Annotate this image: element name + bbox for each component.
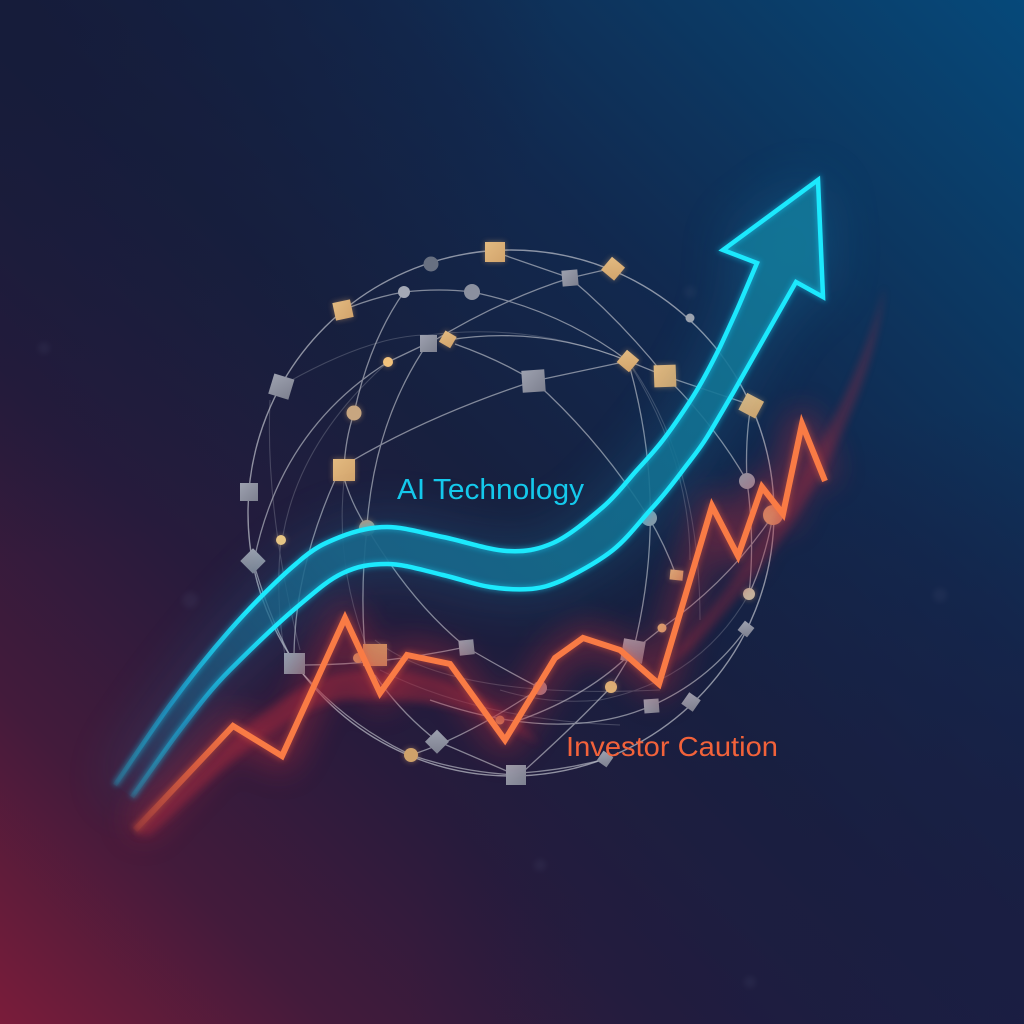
arrow neon outline (115, 180, 823, 797)
rising AI arrow (115, 180, 823, 797)
globe outer ring (248, 250, 774, 776)
gold square nodes (332, 242, 764, 666)
arrow outer glow (115, 180, 823, 797)
grey square nodes (240, 269, 754, 785)
arrow translucent body (115, 180, 823, 797)
label: Investor Caution: Investor Caution (566, 731, 778, 762)
gold circle nodes (276, 357, 783, 762)
globe faint arcs (269, 332, 749, 725)
investor caution jagged line (135, 424, 825, 830)
globe inner arcs (253, 252, 773, 775)
network nodes: squares and circles (240, 242, 783, 785)
grey circle nodes (398, 256, 755, 695)
faint bokeh dots (38, 286, 947, 988)
label: AI Technology: AI Technology (397, 474, 585, 506)
network globe: connecting lines (248, 250, 774, 776)
arrow neon outline glow (115, 180, 823, 797)
caution line: red glow and swooshes (135, 285, 885, 835)
